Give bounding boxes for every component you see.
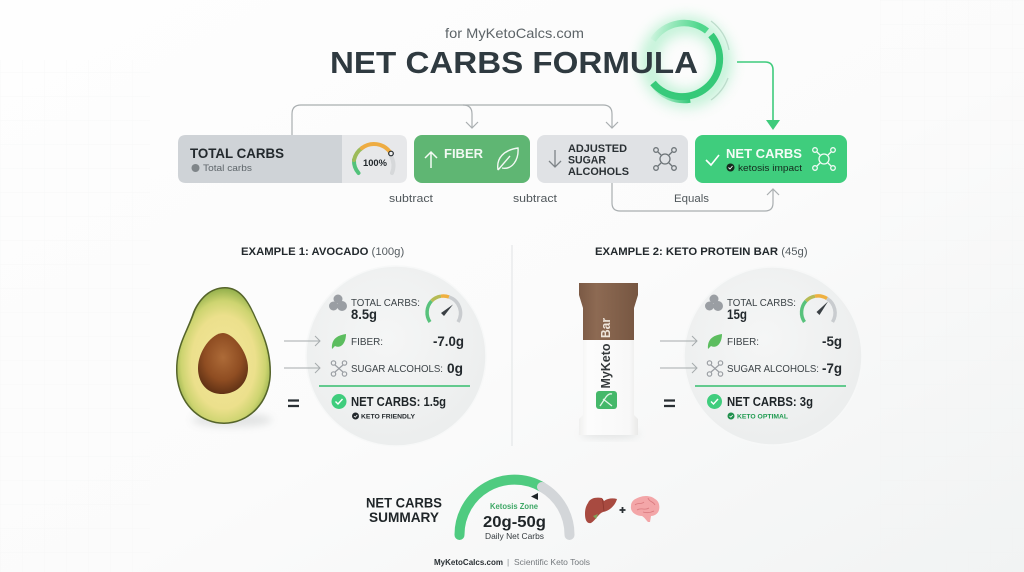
fiber row: FIBER: (727, 336, 759, 348)
subtitle: for MyKetoCalcs.com (445, 25, 584, 41)
panel: bar breakdown (684, 267, 862, 445)
panel: net carbs: ketosis impact (738, 163, 802, 174)
keto friendly badge: KETO FRIENDLY (361, 414, 416, 420)
keto optimal badge: KETO OPTIMAL (737, 414, 788, 420)
total carbs row (727, 297, 796, 322)
icon: brain (631, 496, 659, 522)
icon: leaf (708, 334, 722, 349)
equals sign (664, 400, 675, 406)
icon: molecule (707, 361, 723, 376)
gauge: ketosis zone: Ketosis Zone (490, 501, 538, 511)
sugar alcohols row: -7g (822, 361, 842, 376)
total carbs row: TOTAL CARBS: (727, 297, 796, 309)
fiber row: FIBER: (351, 336, 383, 348)
illustration: keto protein bar: Bar (598, 318, 613, 338)
icon: carbs cloud (329, 294, 347, 311)
panel: adjusted sugar alcohols: SUGAR (568, 154, 606, 166)
summary heading: NET CARBS (366, 494, 442, 510)
total carbs row: 8.5g (351, 307, 377, 322)
fiber row: -5g (822, 334, 842, 349)
icon: check (332, 394, 346, 409)
sugar alcohols row: 0g (447, 361, 463, 376)
operator labels: Equals (674, 193, 710, 205)
sugar alcohols row: SUGAR ALCOHOLS: (727, 363, 819, 375)
net carbs result: NET CARBS: 1.5g (351, 394, 446, 409)
operator labels (389, 193, 710, 205)
arrows: avocado to breakdown (284, 336, 320, 373)
footer: Scientific Keto Tools (514, 557, 590, 567)
sugar alcohols row (727, 361, 842, 376)
icon: glowing progress ring (649, 21, 729, 100)
panel: total carbs (178, 135, 407, 183)
panel: adjusted sugar alcohols (537, 135, 688, 183)
gauge: total carbs (427, 296, 461, 322)
example 1 heading: EXAMPLE 1: AVOCADO (100g) (241, 246, 404, 258)
operator labels: subtract (513, 193, 557, 205)
panel: fiber: FIBER (444, 146, 484, 161)
icon: molecule (654, 148, 676, 170)
footer: | (507, 557, 509, 567)
net carbs result: NET CARBS: 3g (727, 394, 813, 409)
illustration: keto protein bar (579, 283, 640, 438)
gauge: ketosis zone (459, 480, 570, 541)
icon: leaf (498, 148, 518, 170)
footer: MyKetoCalcs.com (434, 557, 503, 567)
panel: avocado breakdown (306, 266, 486, 446)
illustration: keto protein bar: MyKeto (598, 343, 613, 388)
panel: total carbs: TOTAL CARBS (190, 146, 284, 161)
fiber row (351, 334, 464, 349)
title: NET CARBS FORMULA (330, 45, 698, 80)
icon: liver (585, 498, 617, 523)
icon: molecule (813, 148, 835, 170)
fiber row (727, 334, 842, 349)
summary heading: SUMMARY (369, 509, 440, 525)
arrows: bar to breakdown (660, 336, 697, 373)
icon: leaf (332, 334, 346, 349)
panel: adjusted sugar alcohols: ALCOHOLS (568, 166, 629, 178)
fiber row: -7.0g (433, 334, 464, 349)
gauge: total carbs (802, 296, 835, 322)
gauge: ketosis zone: Daily Net Carbs (485, 531, 544, 541)
total carbs row: TOTAL CARBS: (351, 297, 420, 309)
panel: fiber (414, 135, 530, 183)
panel: adjusted sugar alcohols: ADJUSTED (568, 143, 627, 155)
gauge: 100 percent (354, 144, 393, 173)
icon: carbs cloud (705, 294, 723, 311)
total carbs row: 15g (727, 307, 747, 322)
gauge: ketosis zone: 20g-50g (483, 514, 546, 531)
icon: check (707, 394, 722, 409)
panel: net carbs (695, 135, 847, 183)
connector: total carbs to fiber and sugar alcohols (292, 105, 618, 135)
arrow: ring to net carbs (737, 62, 780, 130)
example 2 heading: EXAMPLE 2: KETO PROTEIN BAR (45g) (595, 246, 808, 258)
panel: net carbs: NET CARBS (726, 146, 802, 161)
bar logo (596, 391, 617, 409)
illustration: avocado (176, 287, 272, 427)
sugar alcohols row: SUGAR ALCOHOLS: (351, 363, 443, 375)
equals sign (288, 400, 299, 406)
connector: sugar alcohols to net carbs (612, 183, 779, 211)
plus sign (620, 507, 626, 513)
icon: molecule (331, 361, 347, 376)
panel: total carbs: Total carbs (203, 163, 252, 174)
gauge: 100 percent: 100% (363, 158, 388, 169)
operator labels: subtract (389, 193, 433, 205)
total carbs row (351, 297, 420, 322)
avocado pit (198, 333, 248, 394)
